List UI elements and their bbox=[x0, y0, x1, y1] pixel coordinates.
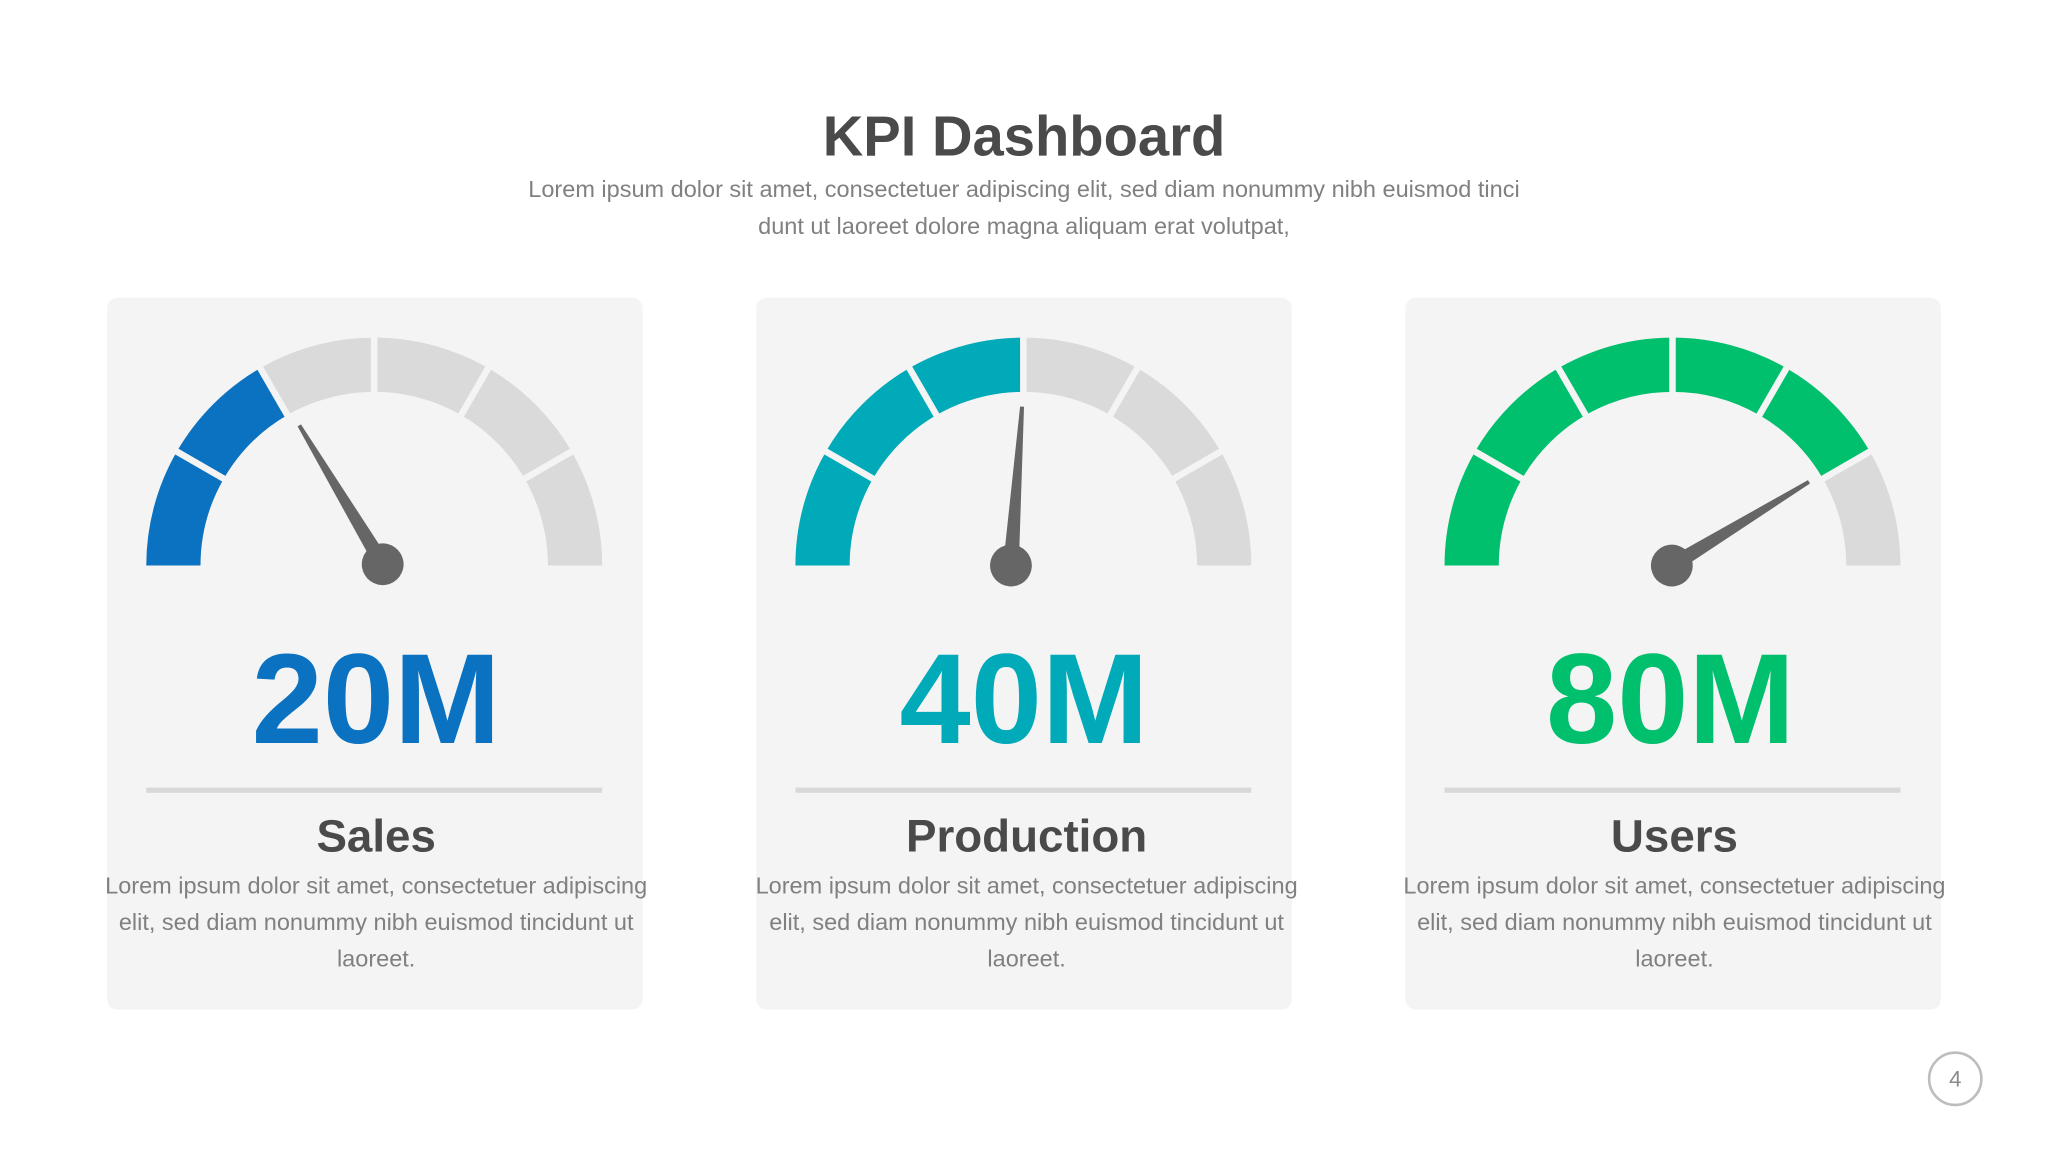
needle bbox=[1643, 464, 1820, 594]
title: KPI Dashboard bbox=[823, 104, 1225, 167]
label: sales: Sales bbox=[316, 811, 436, 862]
description: users: elit, sed diam nonummy nibh euismod tincidunt ut bbox=[1417, 909, 1932, 935]
label: users: Users bbox=[1611, 811, 1738, 862]
label: production: Production bbox=[906, 811, 1147, 862]
page number bbox=[1929, 1053, 1981, 1105]
value: 80M: 80M bbox=[1546, 628, 1795, 771]
page number: 4 bbox=[1949, 1067, 1961, 1092]
needle bbox=[989, 405, 1043, 588]
description: sales: elit, sed diam nonummy nibh euismod tincidunt ut bbox=[119, 909, 634, 935]
gauge: sales bbox=[171, 330, 578, 593]
description: sales: laoreet. bbox=[337, 946, 415, 972]
description: users: Lorem ipsum dolor sit amet, consectetuer adipiscing bbox=[1403, 872, 1945, 898]
description: production: elit, sed diam nonummy nibh euismod tincidunt ut bbox=[769, 909, 1284, 935]
subtitle: dunt ut laoreet dolore magna aliquam erat volutpat, bbox=[758, 213, 1290, 239]
description: users bbox=[1403, 872, 1945, 972]
subtitle bbox=[528, 176, 1520, 239]
subtitle: Lorem ipsum dolor sit amet, consectetuer adipiscing elit, sed diam nonummy nibh euismod tinci bbox=[528, 176, 1520, 202]
value: 20M: 20M bbox=[252, 628, 501, 771]
description: users: laoreet. bbox=[1635, 946, 1714, 972]
description: production: laoreet. bbox=[987, 946, 1066, 972]
panel: users bbox=[1403, 298, 1945, 1010]
gauge: users bbox=[1469, 330, 1876, 594]
gauge: production bbox=[820, 330, 1227, 588]
description: production bbox=[756, 872, 1298, 972]
panel: production bbox=[756, 298, 1298, 1010]
description: sales: Lorem ipsum dolor sit amet, consectetuer adipiscing bbox=[105, 872, 647, 898]
value: 40M: 40M bbox=[899, 628, 1148, 771]
needle bbox=[281, 415, 411, 593]
description: sales bbox=[105, 872, 647, 972]
panel: sales bbox=[105, 298, 647, 1010]
description: production: Lorem ipsum dolor sit amet, consectetuer adipiscing bbox=[756, 872, 1298, 898]
